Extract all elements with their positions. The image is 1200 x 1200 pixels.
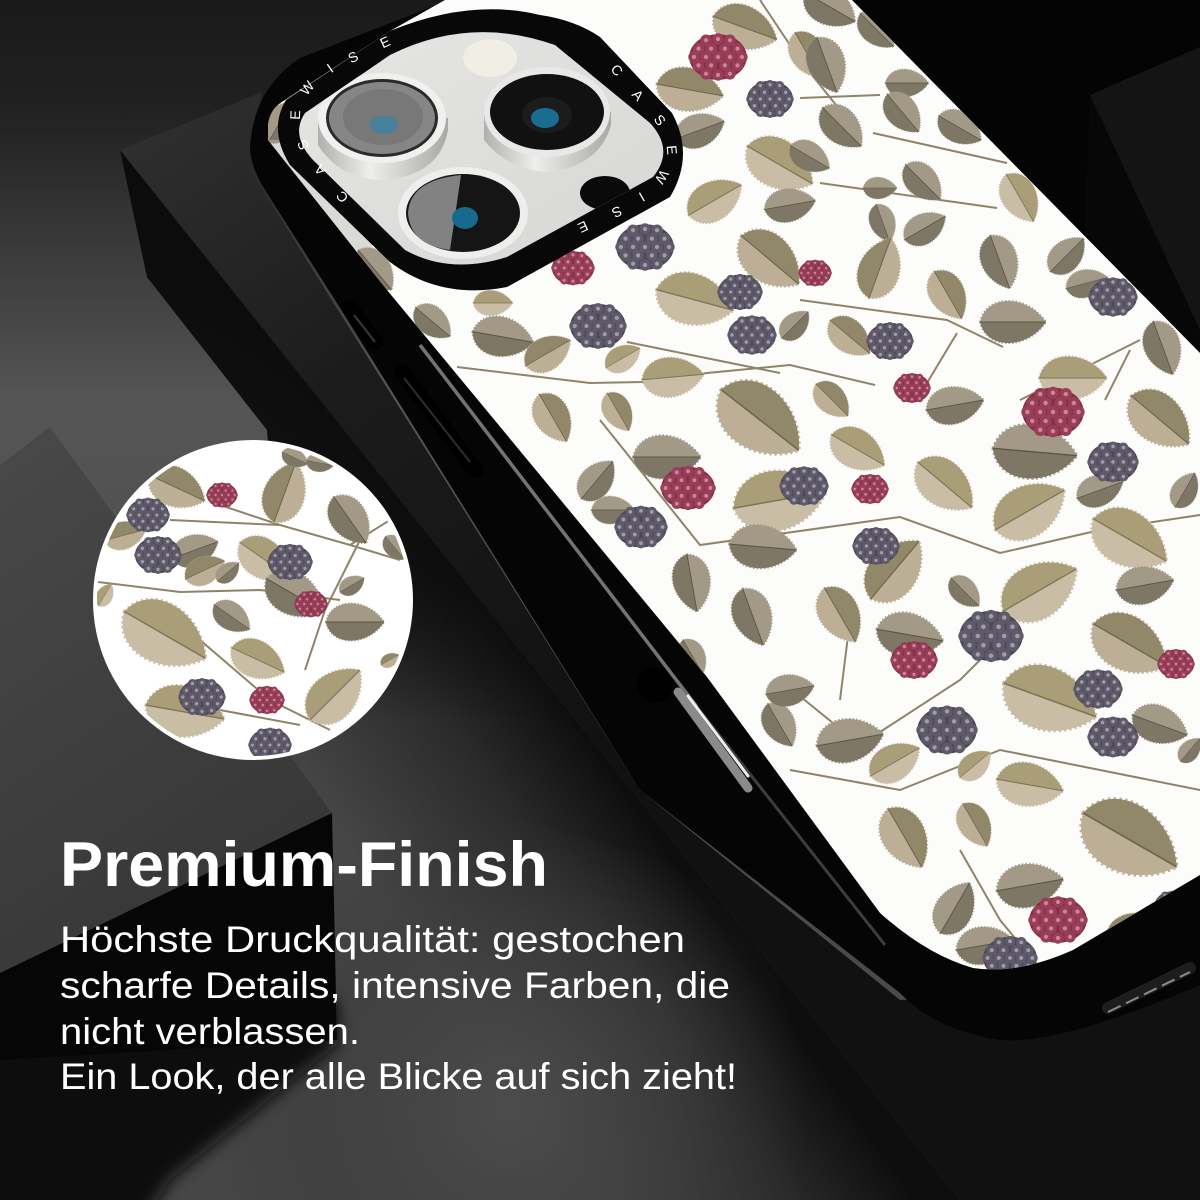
heading: Premium-Finish bbox=[60, 830, 548, 900]
ring lettering: W bbox=[651, 167, 672, 188]
left low block bbox=[0, 427, 332, 973]
sliver leaves beside the camera bbox=[268, 102, 394, 291]
ring lettering: S bbox=[294, 137, 312, 153]
ring lettering: C bbox=[333, 188, 351, 206]
body text: Ein Look, der alle Blicke auf sich zieht! bbox=[60, 1056, 737, 1097]
body text: Höchste Druckqualität: gestochen bbox=[60, 919, 685, 960]
case print area bbox=[250, 0, 1200, 1000]
ring lettering: S bbox=[609, 203, 625, 221]
ring lettering: E bbox=[575, 218, 591, 236]
detail stems bbox=[98, 505, 400, 730]
vine stems bbox=[457, 0, 1200, 968]
leaves bbox=[406, 0, 1200, 968]
camera ring bbox=[278, 9, 683, 290]
ring lettering: I bbox=[324, 60, 336, 76]
ring lettering bbox=[287, 33, 680, 236]
detail berries bbox=[127, 483, 327, 762]
lens two bbox=[484, 67, 611, 172]
body text: scharfe Details, intensive Farben, die bbox=[60, 965, 730, 1006]
camera glass bbox=[299, 32, 663, 265]
ring lettering: E bbox=[287, 110, 303, 120]
body text bbox=[60, 919, 737, 1097]
ring lettering: A bbox=[310, 161, 329, 179]
body text: nicht verblassen. bbox=[60, 1011, 360, 1052]
ring lettering: I bbox=[636, 189, 648, 205]
sensor hole bbox=[580, 176, 630, 210]
ring lettering: E bbox=[664, 145, 680, 155]
lens three bbox=[398, 167, 528, 259]
top right block bbox=[800, 0, 1200, 353]
ring lettering: A bbox=[629, 86, 647, 104]
detail circle bbox=[92, 440, 413, 762]
detail leaves bbox=[92, 444, 412, 744]
ring lettering: W bbox=[297, 77, 318, 98]
ring lettering: S bbox=[345, 48, 361, 66]
side buttons and highlights bbox=[350, 308, 1190, 1012]
ring lettering: E bbox=[377, 33, 393, 51]
lens one bbox=[318, 73, 448, 180]
ring lettering: C bbox=[608, 61, 626, 79]
camera island bbox=[278, 9, 683, 290]
berries bbox=[552, 34, 1194, 979]
ring lettering: S bbox=[651, 111, 669, 129]
lit wall of main block bbox=[0, 150, 960, 1200]
flash bbox=[463, 39, 517, 77]
phone body bbox=[250, 0, 1200, 1040]
